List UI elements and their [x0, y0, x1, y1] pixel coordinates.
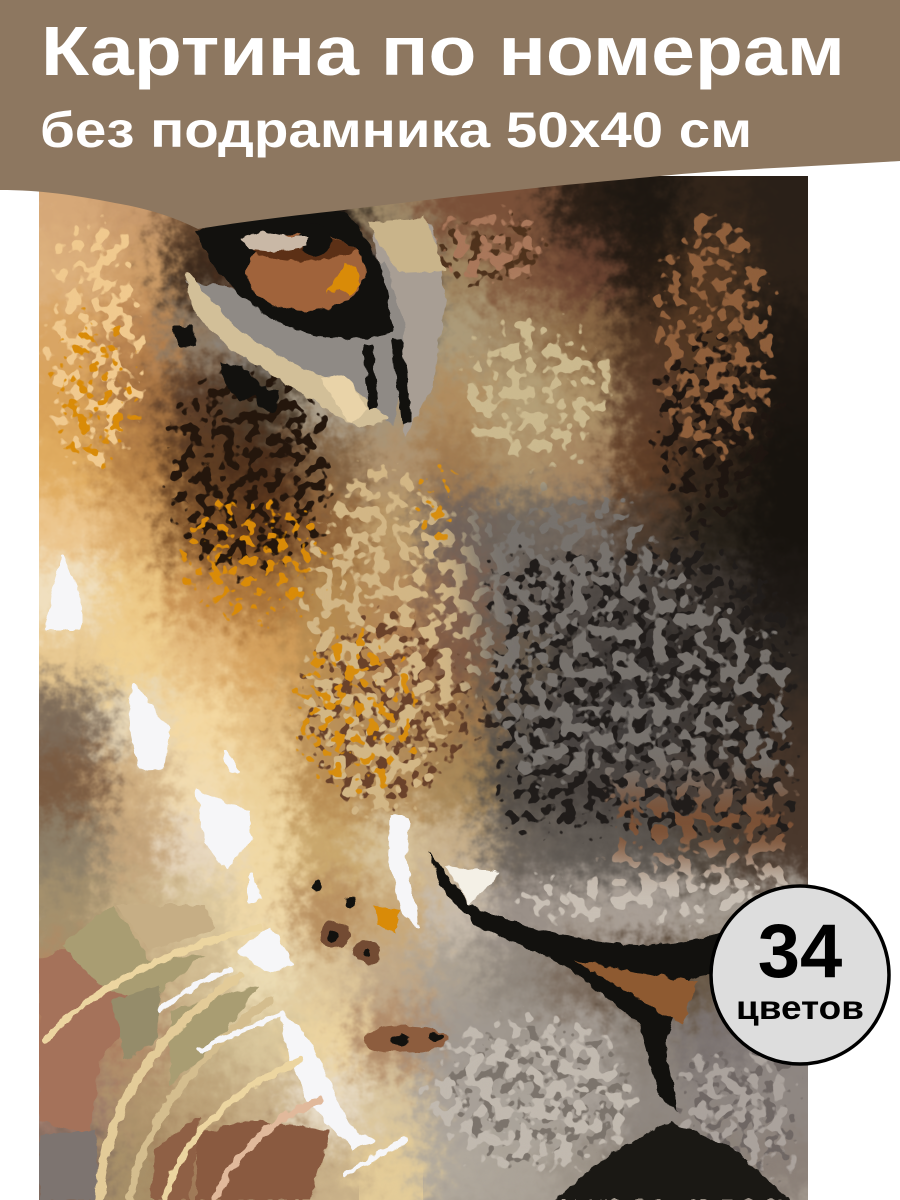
lower-left fur shapes [39, 905, 330, 1200]
badge label: цветов [736, 989, 864, 1026]
iris shadow [250, 235, 355, 261]
lion eye [172, 210, 446, 436]
tan fur above eye corner [368, 218, 445, 272]
pale lid band [187, 272, 388, 430]
light fur flecks [30, 190, 808, 1190]
orange flecks [48, 307, 462, 794]
badge number: 34 [758, 909, 842, 994]
brown nose patch [575, 960, 698, 1024]
dark fur flecks [150, 200, 808, 1190]
amber iris patch [327, 263, 362, 296]
subtitle: без подрамника 50х40 см [40, 102, 752, 158]
dark muzzle spots [312, 881, 447, 1053]
eye black [196, 210, 392, 339]
underpainting: colour masses [39, 176, 808, 1200]
eye highlight [242, 232, 308, 252]
lower lid shadow [186, 260, 405, 425]
mouth [555, 1122, 790, 1200]
badge: 34 colours [711, 886, 889, 1064]
nose and mouth [428, 850, 790, 1200]
whiskers [45, 928, 405, 1198]
black spots under eye [172, 326, 280, 412]
white fur highlights [46, 558, 418, 1148]
tear streak one [363, 345, 378, 410]
title: Картина по номерам [41, 12, 845, 90]
eye surround fur [372, 222, 446, 436]
pupil [299, 231, 332, 257]
bottom edge backing colours [39, 1164, 808, 1200]
muzzle highlight [445, 866, 500, 905]
nose outline [428, 850, 745, 1112]
tear streak two [392, 338, 412, 424]
iris [246, 233, 366, 311]
painting: lion face close-up [39, 176, 808, 1200]
pale highlight under eye [320, 375, 368, 424]
header banner [0, 0, 900, 229]
